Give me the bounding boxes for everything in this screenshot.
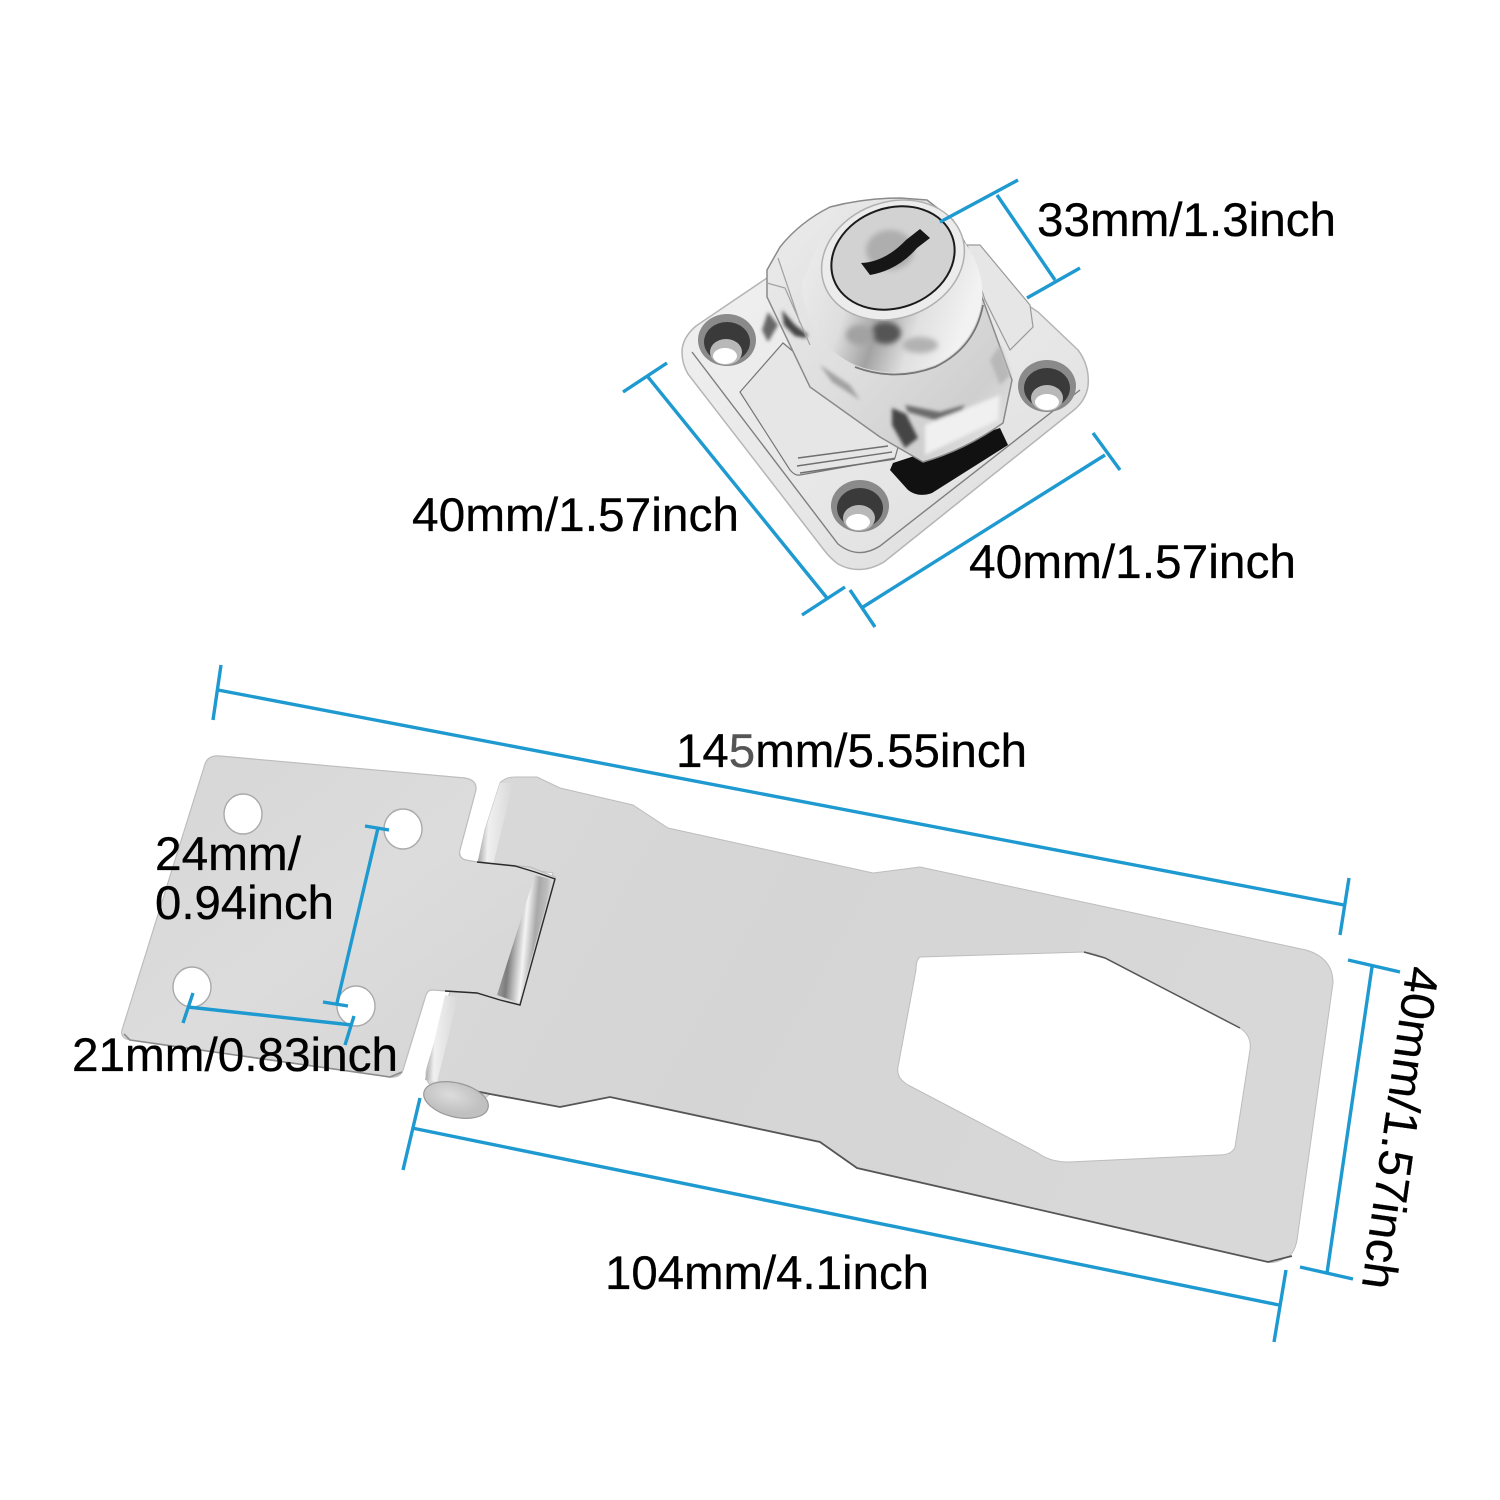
raised square seat	[740, 343, 900, 475]
hole 3	[173, 967, 211, 1007]
hole 4	[337, 986, 375, 1026]
barrel lower ring	[855, 305, 983, 374]
key slot	[861, 229, 930, 275]
lock base plate	[682, 278, 1088, 570]
hood ledge	[767, 258, 810, 345]
panel: cabinet lock product	[682, 181, 1088, 570]
hole top edge shadow	[1084, 952, 1240, 1028]
dimension: hasp strap length	[403, 1098, 1286, 1342]
dimension: hasp width	[1300, 960, 1450, 1293]
hole 1	[224, 794, 262, 834]
latch shading	[782, 310, 1010, 455]
label: 21mm: 21mm/0.83inch	[72, 1028, 398, 1081]
hinge plate	[122, 756, 555, 1077]
dark shadow under latch	[890, 428, 1008, 495]
key cylinder centre shadow	[866, 230, 914, 270]
label: 104mm: 104mm/4.1inch	[605, 1246, 929, 1299]
key cylinder rim	[805, 181, 981, 339]
right side bracket	[967, 245, 1033, 350]
label: 0.94inch: 0.94inch	[155, 876, 334, 929]
label: 40mm left: 40mm/1.57inch	[412, 488, 739, 541]
dimension: hole spacing vertical	[155, 826, 389, 1006]
dimension: hasp overall length	[213, 665, 1349, 935]
lower strap hinge edge	[425, 995, 458, 1082]
knuckle top shadow line	[445, 862, 555, 1005]
seat stripes	[797, 446, 895, 473]
plate lower edge	[124, 1034, 402, 1077]
dimension: lock bottom width	[850, 433, 1296, 627]
label: 145mm: 145mm/5.55inch	[676, 724, 1027, 777]
base plate rim	[692, 352, 1080, 553]
label: 40mm vertical: 40mm/1.57inch	[1352, 964, 1450, 1293]
key cylinder face	[817, 189, 969, 327]
mounting hole top left	[698, 314, 756, 366]
barrel dark reflection	[846, 322, 938, 353]
mounting hole bottom	[831, 480, 889, 532]
dimension: hole spacing horizontal	[72, 993, 398, 1081]
left dark reflection	[762, 312, 778, 342]
strap lower edge	[440, 1084, 1292, 1262]
label: 24mm: 24mm/	[155, 827, 302, 880]
dimension: lock left height	[412, 363, 845, 615]
knuckle chrome curve	[497, 875, 553, 1003]
latch body	[767, 198, 1012, 462]
hole 2	[384, 809, 422, 849]
upper strap hinge edge	[478, 783, 513, 865]
dimension: lock top width	[940, 180, 1336, 298]
hasp strap	[426, 777, 1333, 1262]
hinge pin end	[420, 1076, 492, 1124]
panel: hasp product	[122, 756, 1333, 1262]
label: 33mm: 33mm/1.3inch	[1037, 193, 1336, 246]
mounting hole right	[1018, 360, 1076, 412]
lock barrel	[802, 240, 982, 372]
label: 40mm bottom: 40mm/1.57inch	[969, 535, 1296, 588]
